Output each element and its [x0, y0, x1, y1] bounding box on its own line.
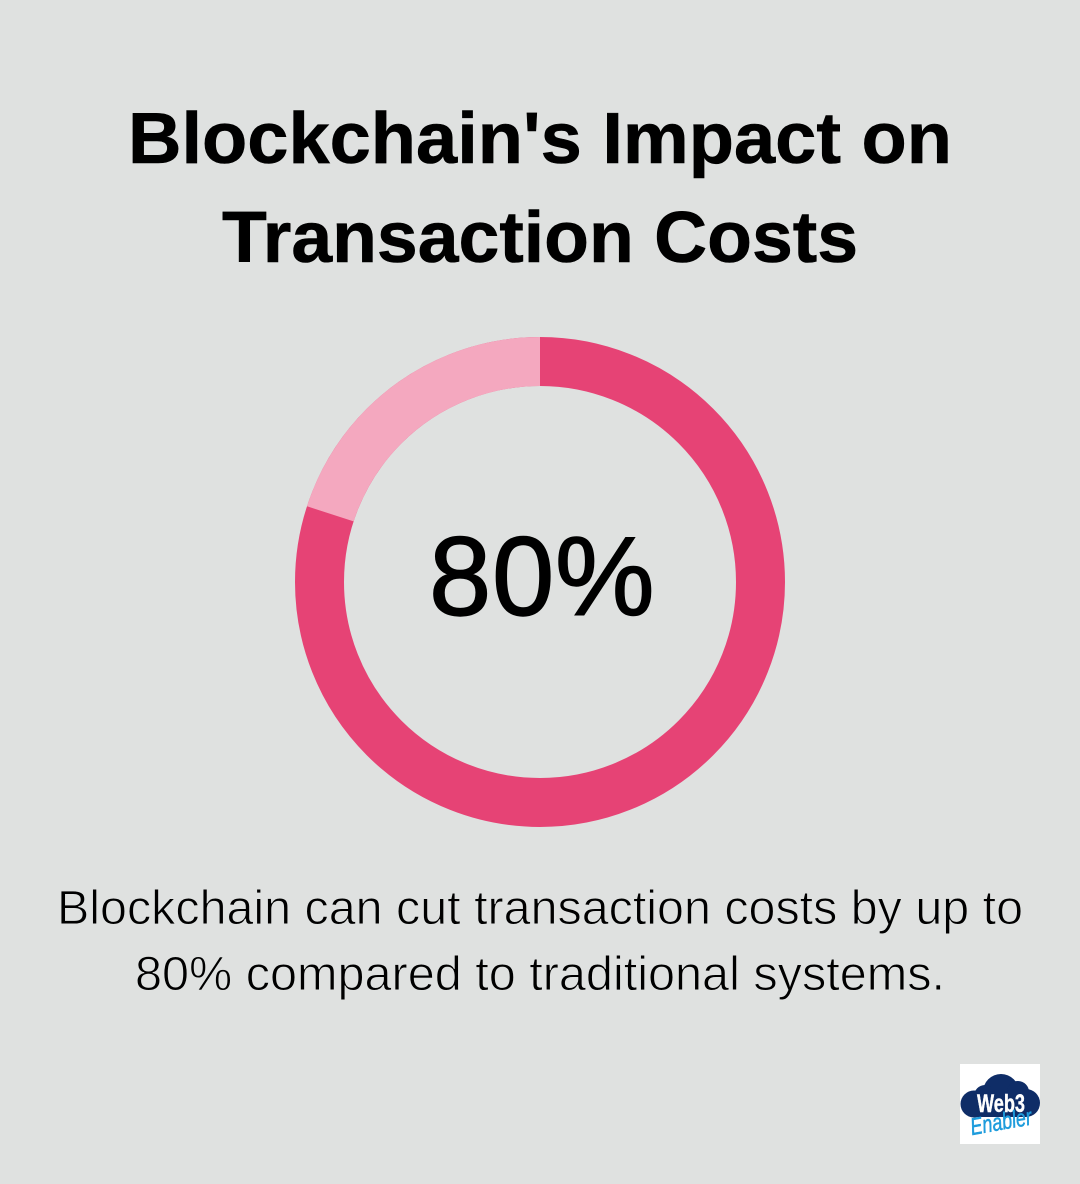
remaining segment: 20 percent [307, 337, 540, 521]
donut chart: 80% [307, 337, 760, 802]
icon: cloud [960, 1074, 1040, 1118]
logo: Web3 Enabler: Web3 [977, 1090, 1025, 1118]
title: Transaction Costs [222, 198, 858, 278]
title [128, 99, 952, 278]
description text: Blockchain can cut transaction costs by up to [57, 882, 1023, 935]
center value: 80% [429, 514, 655, 639]
title: Blockchain's Impact on [128, 99, 952, 179]
logo: Web3 Enabler: Enabler [968, 1104, 1035, 1141]
description text [57, 882, 1023, 1001]
main segment: 80 percent [320, 362, 760, 802]
description text: 80% compared to traditional systems. [135, 948, 945, 1001]
logo: Web3 Enabler [960, 1064, 1040, 1144]
